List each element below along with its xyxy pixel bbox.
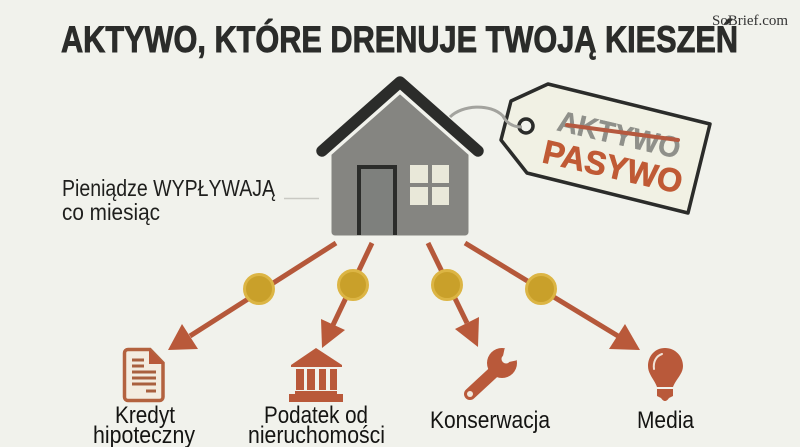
- label: property tax: [248, 402, 385, 447]
- watermark: SoBrief.com: [712, 13, 789, 29]
- tag text: new word: PASYWO: [539, 133, 686, 200]
- icon: mortgage document: [124, 349, 164, 400]
- text block: money flows out: [62, 175, 276, 225]
- label: property tax: Podatek od: [264, 402, 368, 429]
- price tag: [501, 84, 710, 213]
- door: [359, 167, 395, 235]
- house body: [332, 95, 468, 235]
- arrow: to maintenance: [428, 243, 479, 347]
- icon: bank building: [289, 348, 343, 402]
- coins: [244, 270, 556, 304]
- icon: wrench: [467, 338, 527, 397]
- tag string: [450, 107, 522, 127]
- text block: money flows out: Pieniądze WYPŁYWAJĄ: [62, 175, 276, 201]
- icon: house: [322, 82, 478, 235]
- arrow: to property tax: [321, 243, 372, 348]
- text block: money flows out: co miesiąc: [62, 199, 160, 225]
- label: mortgage: Kredyt: [115, 402, 175, 429]
- label: mortgage: [93, 402, 195, 447]
- tag shape: [501, 84, 710, 213]
- arrow: to utilities: [465, 243, 640, 350]
- window: [410, 165, 449, 205]
- label: maintenance: Konserwacja: [430, 407, 551, 434]
- tag text: crossed out word: AKTYWO: [554, 106, 683, 165]
- tag hole: [519, 119, 533, 133]
- label: utilities: Media: [637, 407, 695, 434]
- arrow: to mortgage: [168, 243, 336, 350]
- icon: light bulb: [648, 348, 683, 401]
- strikethrough: [567, 125, 678, 140]
- roof: [322, 82, 478, 151]
